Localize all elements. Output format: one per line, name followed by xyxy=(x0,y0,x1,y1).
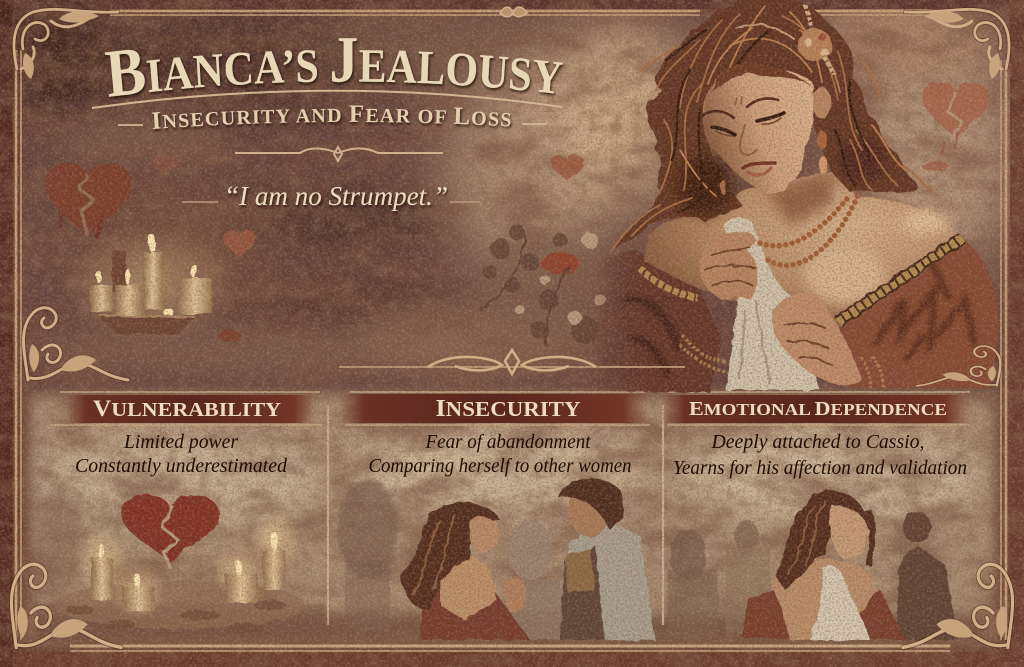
corner ornament: bottom left xyxy=(11,564,121,647)
main portrait: Bianca xyxy=(590,0,999,392)
man xyxy=(560,520,655,640)
illustration: insecurity xyxy=(338,478,655,640)
hair ornament xyxy=(735,5,835,75)
rose bush xyxy=(479,224,611,345)
hair strands xyxy=(612,6,935,250)
heading banner xyxy=(660,395,970,423)
quote: “I am no Strumpet.” xyxy=(224,181,448,211)
heading banner xyxy=(340,394,648,423)
subtitle side dashes xyxy=(118,124,547,125)
body text xyxy=(368,431,632,477)
lower panel wash xyxy=(30,394,995,642)
corner ornament: bottom right xyxy=(903,564,1013,647)
title arc rule xyxy=(92,91,562,108)
panel: insecurity xyxy=(340,394,648,477)
facial features xyxy=(703,97,784,175)
icon: floating small hearts xyxy=(152,155,584,342)
quote side dashes xyxy=(182,201,480,203)
corner ornament: middle left xyxy=(24,308,128,380)
body text: Deeply attached to Cassio, xyxy=(711,431,924,453)
icon: large broken heart xyxy=(45,163,131,238)
lace handkerchief xyxy=(722,218,820,390)
icon: broken heart, upper right xyxy=(922,82,989,171)
body text: Yearns for his affection and validation xyxy=(673,457,967,479)
corner ornament: middle right xyxy=(917,346,1000,386)
icon: candles on tray xyxy=(60,225,240,345)
heading: INSECURITY xyxy=(436,396,580,422)
corner ornament: top left xyxy=(14,9,118,79)
body text: Limited power xyxy=(123,431,238,453)
illustration: emotional dependence xyxy=(668,491,958,640)
ornament: mid flourish xyxy=(428,350,596,374)
title: BIANCA’S JEALOUSY xyxy=(104,38,566,100)
bracelets xyxy=(680,335,883,388)
gold trim xyxy=(838,238,962,322)
panel: vulnerability xyxy=(66,395,314,477)
panel art xyxy=(35,478,958,640)
hands xyxy=(700,232,758,300)
woman xyxy=(420,556,530,640)
illustration: vulnerability xyxy=(35,485,325,640)
body text xyxy=(75,431,288,477)
shoulders and chest xyxy=(644,170,962,326)
ornament: top centre xyxy=(500,7,527,17)
body text: Comparing herself to other women xyxy=(368,455,632,477)
heading: EMOTIONAL DEPENDENCE xyxy=(689,398,947,420)
body text: Constantly underestimated xyxy=(75,455,288,477)
dress right sleeve and bodice xyxy=(840,238,999,388)
ear and earrings xyxy=(720,87,831,194)
face xyxy=(703,68,814,194)
dress left sleeve xyxy=(590,250,722,392)
corner ornament: top right xyxy=(905,9,1009,79)
divider flourish xyxy=(235,147,443,161)
body text xyxy=(673,431,967,479)
panel: emotional dependence xyxy=(660,395,970,479)
necklace xyxy=(760,195,858,265)
heading banner xyxy=(66,395,314,423)
body text: Fear of abandonment xyxy=(425,431,591,453)
hair xyxy=(615,0,917,248)
rule across the sleeve xyxy=(600,366,685,368)
heading: VULNERABILITY xyxy=(93,396,282,421)
subtitle: INSECURITY AND FEAR OF LOSS xyxy=(152,106,514,132)
candles and broken heart, upper left xyxy=(45,155,611,345)
